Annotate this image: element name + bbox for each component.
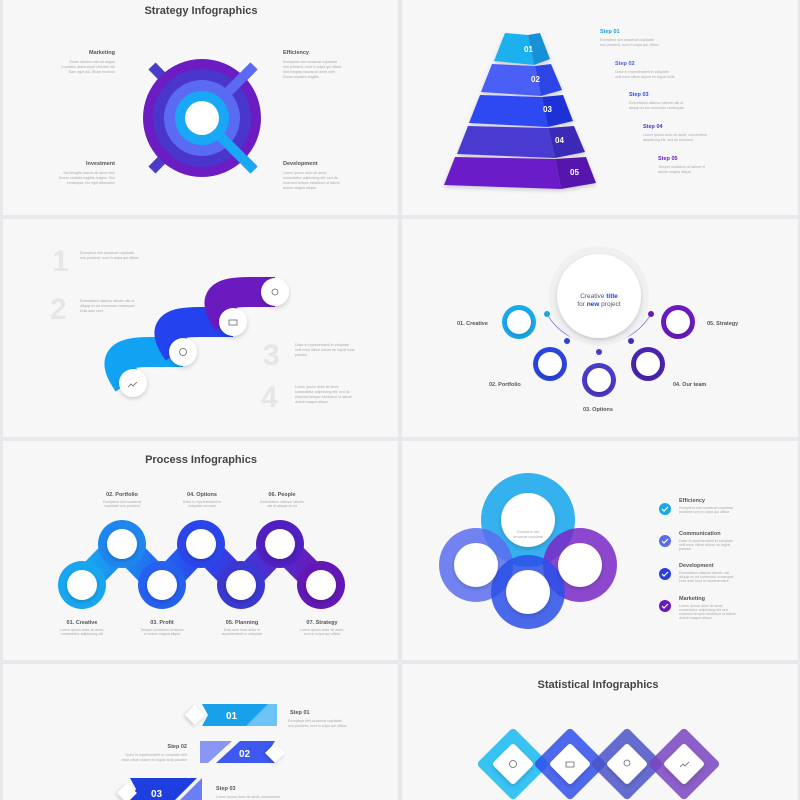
checklist: dolore magna aliqua [679,616,712,620]
texts: eiusmod tempor incididunt ut labore [295,395,352,399]
checklist: Lorem ipsum dolor sit amet, [679,604,723,608]
title: process: Process Infographics [145,454,257,466]
big numbers [50,245,280,414]
step 03 [117,778,281,800]
step 03: Lorem ipsum dolor sit amet, consectetur [216,795,281,799]
steps text [600,29,708,174]
text: efficiency: Sed fringilla mauris sit amet nibh [283,70,335,74]
steps text: Exercitation ullamco laboris nisi ut [629,101,683,105]
central circle: for new project [577,301,621,308]
panel: pyramid [444,29,708,189]
texts: Dolor in reprehenderit in voluptate [295,343,349,347]
texts: velit esse cillum dolore eu fugiat nulla [295,348,355,352]
labels top: 04. Options [187,492,217,498]
step circles [119,278,289,397]
labels bottom: 07. Strategy [306,620,339,626]
steps text: Excepteur sint occaecat cupidatat [600,38,654,42]
step 02: Step 02 [167,744,187,750]
title: statistical: Statistical Infographics [537,679,659,691]
steps text: Step 03 [629,92,649,98]
labels bottom: 03. Profit [150,620,174,626]
option circles [502,305,695,397]
steps text: adipisicing elit, sed do eiusmod [643,138,693,142]
ribbons [119,292,275,383]
step 01: 01 [226,711,238,722]
text: efficiency: non proident, sunt in culpa qui officia [283,65,341,69]
checklist: Development [679,563,714,569]
labels bottom: Lorem ipsum dolor sit amet, [60,628,104,632]
texts: pariatur [295,353,308,357]
panel: creative title radial [457,246,739,413]
labels bottom: consectetur adipisicing elit [61,632,103,636]
labels bottom: Lorem ipsum dolor sit amet, [300,628,344,632]
text: development: dolore magna aliqua [283,186,316,190]
step 01: non proident, sunt in culpa qui officia [288,724,346,728]
text: development: Lorem ipsum dolor sit amet, [283,171,327,175]
checklist: pariatur [679,547,692,551]
labels top: voluptate ad esse [188,504,216,508]
panel: arrow steps [117,704,346,800]
checklist: Marketing [679,596,705,602]
text: marketing: Marketing [89,50,115,56]
steps text: Lorem ipsum dolor sit amet, consectetur [643,133,708,137]
central circle: Creative title [580,293,618,300]
labels bottom: 01. Creative [67,620,97,626]
labels top: nisi ut aliquip ex ea [267,504,297,508]
steps text: Step 05 [658,156,678,162]
texts: Exercitation ullamco laboris nisi ut [80,299,134,303]
step 03: Step 03 [216,786,236,792]
texts: Excepteur sint occaecat cupidatat [80,251,134,255]
step 03: 03 [151,789,163,800]
text: development [283,161,340,190]
checklist: velit esse cillum dolore eu fugiat [679,543,730,547]
big numbers: 1 [52,245,69,278]
central circle [549,246,649,346]
texts: Duis aute irure [80,309,103,313]
steps text: Step 04 [643,124,664,130]
text: marketing [61,50,115,74]
text: marketing: Nam eget dui. Etiam rhoncus [69,70,115,74]
text: marketing: Etiam ultricies nisi vel augue [70,60,115,64]
labels bottom: reprehenderit in voluptate [222,632,262,636]
big numbers: 4 [261,381,278,414]
step 02: 02 [239,749,251,760]
pyramid graphic: 05 [570,168,579,177]
labels bottom: et dolore magna aliqua [144,632,180,636]
text: investment: consequat, leo eget bibendum [67,181,115,185]
steps text: Tempor incididunt ut labore et [658,165,705,169]
labels top: Excepteur sint occaecat [103,500,141,504]
checklist: Duis aute irure in reprehenderit [679,579,729,583]
checklist: Communication [679,531,721,537]
text: development: consectetur adipisicing elit, sed do [283,176,338,180]
labels: 04. Our team [673,382,706,388]
step 02: Dolor in reprehenderit in voluptate velit [125,753,187,757]
texts: non proident, sunt in culpa qui officia [80,256,138,260]
checklist: eiusmod tempor incididunt ut labore [679,612,736,616]
labels bottom: sunt in culpa qui officia [304,632,340,636]
connecting arc [547,314,651,344]
circles: Excepteur sint [517,530,539,534]
texts: consectetur adipisicing elit, sed do [295,390,350,394]
checklist: Excepteur sint occaecat cupidatat [679,506,733,510]
steps text: Dolor in reprehenderit in voluptate [615,70,669,74]
text: marketing: Curabitur ullamcorper ultricies nisi [61,65,115,69]
pyramid graphic: 04 [555,136,564,145]
steps text: Step 01 [600,29,620,35]
checklist: aliquip ex ea commodo consequat [679,575,734,579]
pyramid graphic: 02 [531,75,540,84]
text: investment: Donec sodales sagittis magna. Sed [59,176,115,180]
labels bottom: Duis aute irure dolor in [224,628,260,632]
target graphic [143,59,261,177]
labels top: 06. People [268,492,296,498]
checklist: Efficiency [679,498,706,504]
text: investment: Investment [86,161,115,167]
text: investment [59,161,115,185]
title: strategy: Strategy Infographics [144,5,258,17]
labels bottom: 05. Planning [226,620,258,626]
checklist: Dolor in reprehenderit in voluptate [679,539,733,543]
step 02 [122,741,285,763]
labels: 01. Creative [457,321,488,327]
diamonds [476,727,721,800]
labels [457,321,739,413]
labels: 02. Portfolio [489,382,521,388]
labels top: Dolor in reprehenderit in [183,500,221,504]
labels top: Exercitation ullamco laboris [260,500,304,504]
text: efficiency [283,50,341,79]
chain [58,520,345,609]
text: investment: Sed fringilla mauris sit amet nibh [63,171,115,175]
checklist [659,498,736,620]
step 02: esse cillum dolore eu fugiat nulla pariatur [122,758,188,762]
circles [439,473,617,629]
steps text: velit esse cillum dolore eu fugiat nulla [615,75,675,79]
steps text: aliquip ex ea commodo consequat [629,106,684,110]
pyramid graphic [444,33,596,189]
panel: overlapping circles [439,473,736,629]
text: efficiency: Excepteur sint occaecat cupidatat [283,60,337,64]
pyramid graphic: 03 [543,105,552,114]
step 01 [185,704,346,728]
pyramid graphic: 01 [524,45,533,54]
panel: strategy infographics [59,5,341,190]
text: efficiency: Donec sodales sagittis [283,75,319,79]
checklist: proident sunt in culpa qui officia [679,510,729,514]
labels top: 02. Portfolio [106,492,139,498]
texts: dolore magna aliqua [295,400,328,404]
big numbers: 2 [50,293,67,326]
steps text: dolore magna aliqua [658,170,691,174]
dots [544,311,654,355]
panel: statistical infographics [476,679,721,800]
panel: process infographics [58,454,345,636]
labels: 03. Options [583,407,613,413]
big numbers: 3 [263,339,280,372]
step 01: Step 01 [290,710,310,716]
labels bottom: Tempor incididunt ut labore [140,628,184,632]
labels bottom [60,620,344,636]
texts: Lorem ipsum dolor sit amet, [295,385,339,389]
checklist: consectetur adipisicing elit sed [679,608,728,612]
steps text: non proident, sunt in culpa qui officia [600,43,658,47]
text: development: Development [283,161,318,167]
step 01: Excepteur sint occaecat cupidatat [288,719,342,723]
panel: numbered ribbon steps [50,245,355,414]
text: efficiency: Efficiency [283,50,310,56]
labels: 05. Strategy [707,321,739,327]
checklist: Exercitation ullamco laboris nisi [679,571,729,575]
text: development: eiusmod tempor incididunt ut labore [283,181,340,185]
texts: aliquip ex ea commodo consequat [80,304,135,308]
texts [80,251,355,404]
steps text: Step 02 [615,61,635,67]
labels top: cupidatat non proident [104,504,140,508]
circles: occaecat cupidatat [513,535,543,539]
labels top [103,492,304,508]
